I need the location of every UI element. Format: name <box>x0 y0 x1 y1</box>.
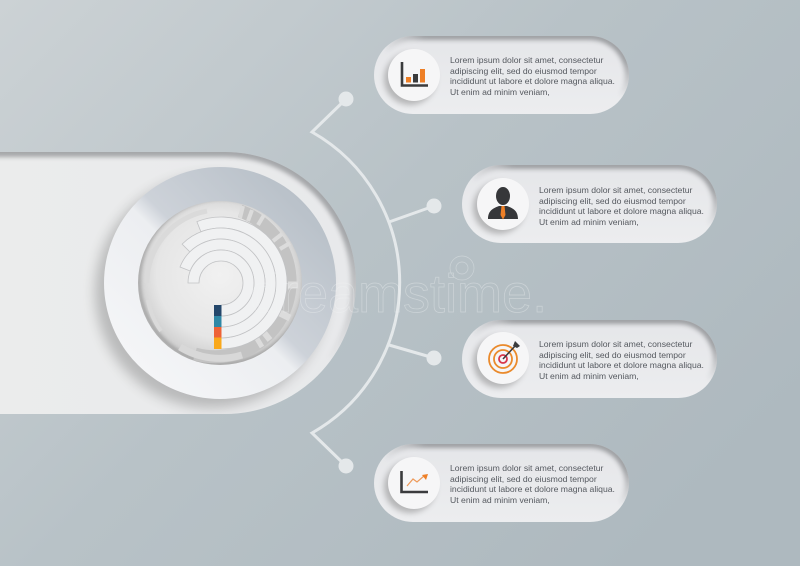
icon: target with arrow <box>473 332 529 388</box>
spiral rings chart <box>180 217 287 349</box>
main circular disc <box>95 167 336 408</box>
text block 2: Lorem ipsum dolor sit amet, consectetur <box>539 185 692 195</box>
text block 1: Ut enim ad minim veniam, <box>450 87 550 97</box>
text block 2: adipiscing elit, sed do eiusmod tempor <box>539 196 686 206</box>
panel 4 <box>374 444 629 522</box>
text block 4: Lorem ipsum dolor sit amet, consectetur <box>450 463 603 473</box>
text block 3: adipiscing elit, sed do eiusmod tempor <box>539 350 686 360</box>
text block 1: Lorem ipsum dolor sit amet, consectetur <box>450 55 603 65</box>
connector: curved line with four branches <box>312 92 442 474</box>
text block 2: Ut enim ad minim veniam, <box>539 217 639 227</box>
icon: businessman <box>473 178 529 234</box>
icon: bar chart <box>384 49 440 105</box>
inner hollow dial <box>138 198 305 365</box>
text block 3: Lorem ipsum dolor sit amet, consectetur <box>539 339 692 349</box>
text block 3: incididunt ut labore et dolore magna aliqua. <box>539 360 704 370</box>
text block 1: incididunt ut labore et dolore magna aliqua. <box>450 76 615 86</box>
text block 3: Ut enim ad minim veniam, <box>539 371 639 381</box>
watermark: dreamstime. <box>250 264 547 324</box>
text block 4: incididunt ut labore et dolore magna aliqua. <box>450 484 615 494</box>
text block 1: adipiscing elit, sed do eiusmod tempor <box>450 66 597 76</box>
text block 4: Ut enim ad minim veniam, <box>450 495 550 505</box>
panel: main horizontal bar with rounded end <box>0 152 356 414</box>
colour key bars <box>214 305 222 349</box>
panel 3 <box>462 320 717 398</box>
icon: line chart <box>384 457 440 513</box>
panel 2 <box>462 165 717 243</box>
text block 4: adipiscing elit, sed do eiusmod tempor <box>450 474 597 484</box>
panel 1 <box>374 36 629 114</box>
text block 2: incididunt ut labore et dolore magna aliqua. <box>539 206 704 216</box>
